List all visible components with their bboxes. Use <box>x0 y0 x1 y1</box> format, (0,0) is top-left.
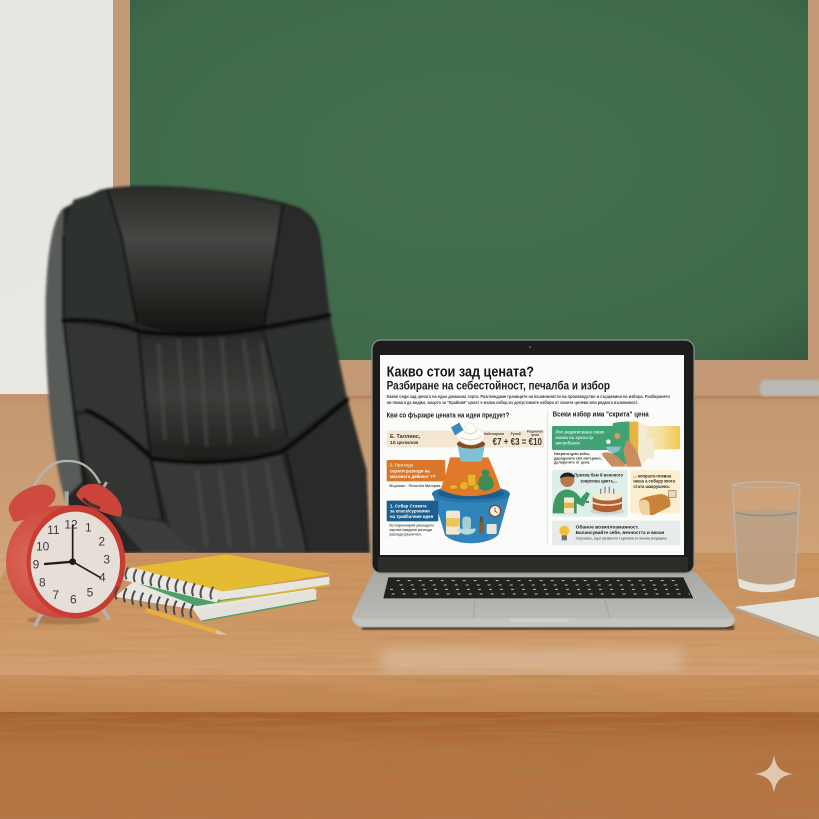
clock numerals: 6 <box>70 592 77 606</box>
keyboard <box>383 577 693 598</box>
desk front edge <box>0 675 819 712</box>
green notebook <box>115 582 317 622</box>
tray on board ledge <box>760 380 819 396</box>
right panel 2: person with cake: зоирлова цвятъ... <box>580 479 617 484</box>
clock numerals: 9 <box>33 557 40 571</box>
alarm clock <box>6 461 125 625</box>
clock numerals: 4 <box>99 570 106 584</box>
desk top <box>0 553 819 676</box>
title: Какво стои зад цената? <box>387 365 534 381</box>
right panel 1: cost of raw choice: несуобасит. <box>555 441 581 446</box>
column divider <box>546 410 549 545</box>
camera <box>529 346 531 348</box>
clock hands <box>45 525 100 577</box>
yellow notebook <box>123 554 332 603</box>
clock numerals: 2 <box>98 535 105 549</box>
chair side band <box>46 208 82 498</box>
chair seams <box>63 190 347 552</box>
right panel 2: person with cake: Прихов бам й вононого <box>574 473 623 478</box>
office chair <box>46 186 370 553</box>
laptop screen infographic <box>380 355 684 555</box>
desk front panel <box>0 712 819 819</box>
top tier label and formula: Кабелирани <box>484 432 504 436</box>
chalkboard frame <box>113 0 819 400</box>
green chalkboard <box>130 0 808 360</box>
orange label: 2. Прихода <box>390 463 414 468</box>
sparkle watermark <box>755 755 793 793</box>
top tier: cupcake <box>451 423 485 462</box>
clock numerals: 11 <box>47 523 60 537</box>
top tier label and formula: цена <box>531 433 539 437</box>
orange label <box>387 460 445 488</box>
laptop reflection on desk <box>382 648 682 672</box>
jars and items <box>446 505 501 535</box>
top tier label and formula <box>387 430 544 448</box>
notebooks <box>115 554 332 635</box>
wall <box>0 0 819 400</box>
right panel 2: person with cake <box>552 470 628 517</box>
right panel 1: cost of raw choice: кахма на зрагы ip <box>555 435 593 440</box>
white paper folder <box>735 597 819 640</box>
right panel 3: bread: стата шакрушена. <box>633 484 670 489</box>
top tier label and formula: Рупий <box>511 432 521 436</box>
clock bells <box>9 482 122 522</box>
blue label: разходи различен. <box>389 532 422 536</box>
right panel 4: insight with bulb <box>552 521 680 545</box>
middle tier: orange layer <box>441 457 501 496</box>
orange label: масовата дейност ?? <box>390 474 436 479</box>
clock face <box>31 512 120 613</box>
subtitle: Разбиране на себестойност, печалба и избор <box>387 379 610 392</box>
orange label: скрити разходи на <box>390 468 430 473</box>
intro text: Какво седи зад цената на една домашна торта. Разглеждаме границите на възможности на производство и сърцевина на избора. Разбирането <box>387 394 670 399</box>
left heading: Кви со фързаре цената на идеи предует? <box>387 410 510 419</box>
orange label: Върхове · Печалби Материа <box>389 484 441 488</box>
wood wainscot panel <box>0 394 819 564</box>
top tier label and formula: Рационал <box>527 430 543 434</box>
top tier label and formula: €7 + €3 = €10 <box>493 437 542 448</box>
top tier label and formula: 10 целилов <box>390 440 418 446</box>
blue label: на трайбалния идея <box>390 514 434 519</box>
clock numerals: 3 <box>103 552 110 566</box>
blue label: хартии каждяни разходи <box>389 528 432 532</box>
clock numerals: 5 <box>87 586 94 600</box>
seat back lower section <box>77 403 370 553</box>
right panel 1: cost of raw choice <box>552 422 680 467</box>
clock feet <box>35 608 109 625</box>
laptop <box>352 340 735 630</box>
right panel 3: bread: неша а собару ккота <box>633 479 676 484</box>
blue label: за класа/суровини <box>390 509 430 514</box>
top tier label and formula: Е. Таллинс, <box>390 434 421 440</box>
intro text: ни помага да видим, защото за "Крайния" цялат е малка избор из допустимите избори от своите целеви или рядката възможност. <box>387 400 638 405</box>
clock body <box>6 506 114 618</box>
water glass <box>732 482 800 592</box>
pencil <box>146 610 228 635</box>
right panel 1: cost of raw choice: дарлдеката свя материал, <box>554 456 602 460</box>
right heading: Всеки избор има "скрита" цена <box>553 410 649 419</box>
intro text <box>387 394 670 405</box>
laptop base <box>352 572 735 627</box>
clock numerals: 10 <box>36 540 50 554</box>
clock numerals <box>33 517 110 606</box>
laptop lid <box>372 340 694 573</box>
clock numerals: 7 <box>52 588 59 602</box>
right panel 3: bread: ... копрало-плевна <box>633 473 672 478</box>
base tier: blue bowl <box>432 485 510 543</box>
laptop shadow <box>362 625 734 630</box>
right panel 1: cost of raw choice: деларотите ог цена. <box>554 461 590 465</box>
headrest <box>63 187 329 334</box>
clock numerals: 8 <box>39 576 46 590</box>
right panel 4: insight with bulb: Балансувайте себе, вечността и вкоан <box>576 530 665 535</box>
lumbar section <box>63 320 347 463</box>
right panel 4: insight with bulb: Обаное возиплоамаяност. <box>576 524 639 529</box>
clock handle <box>33 461 100 488</box>
right panel 3: bread <box>630 470 680 515</box>
blue label <box>387 501 438 536</box>
clock numerals: 1 <box>85 521 92 535</box>
clock numerals: 12 <box>64 517 78 531</box>
blue label: 1. Собар Стоките <box>390 503 427 508</box>
right panel 1: cost of raw choice: Лох редигисвана ошие <box>555 429 605 434</box>
right panel 1: cost of raw choice: Нахрита цран избы, <box>554 452 590 456</box>
right panel 4: insight with bulb: Слуховое, зцел размното търгачка от мъчна изгражни. <box>576 537 667 541</box>
blue label: Из пороенарий разходите <box>389 524 434 528</box>
